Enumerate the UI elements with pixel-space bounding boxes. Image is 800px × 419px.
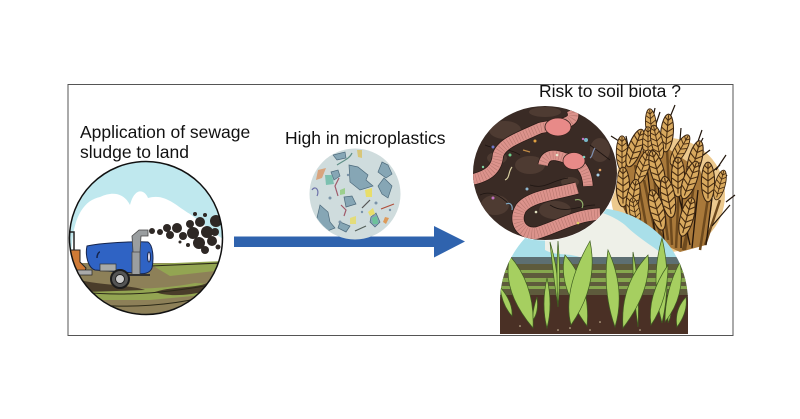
wheat stem mass bbox=[620, 140, 712, 252]
arrow bbox=[234, 226, 465, 258]
microplastic fragments bbox=[505, 148, 595, 210]
worm: middle bbox=[543, 155, 588, 186]
icon: wheat circle bbox=[611, 105, 735, 252]
icon: microplastics circle bbox=[310, 148, 400, 240]
heading: application of sewage sludge: sludge to land bbox=[80, 142, 189, 162]
icon: sludge spreader circle bbox=[68, 160, 224, 318]
icon: blue tank bbox=[86, 230, 153, 275]
worm: upper bbox=[470, 110, 573, 180]
seedling blades bbox=[500, 238, 686, 328]
heading: high in microplastics: High in microplastics bbox=[285, 128, 446, 148]
worm: lower bbox=[518, 188, 600, 233]
icon: smoke plume bbox=[149, 212, 222, 254]
wheat awns bbox=[611, 105, 735, 226]
frame bbox=[68, 84, 733, 336]
heading: application of sewage sludge: Application of sewage bbox=[80, 122, 250, 142]
heading: risk to soil biota: Risk to soil biota ? bbox=[539, 81, 681, 101]
icon: tractor bbox=[69, 232, 92, 275]
icon: seedlings field circle bbox=[498, 205, 690, 336]
icon: earthworm soil circle bbox=[473, 106, 618, 240]
icon: wheel bbox=[111, 270, 129, 288]
worm heads bbox=[545, 118, 585, 170]
